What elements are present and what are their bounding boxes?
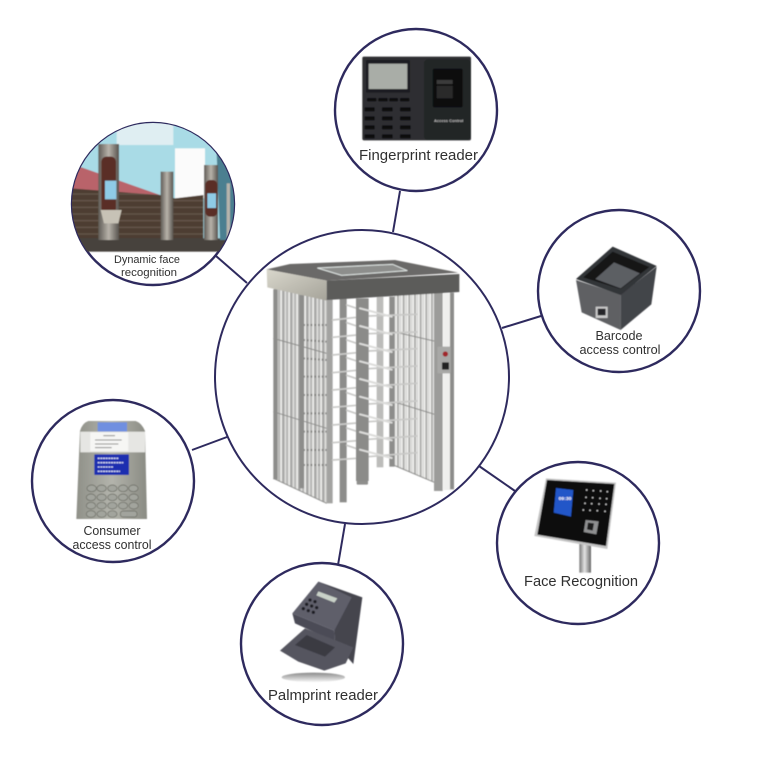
panel: face recognition <box>497 462 659 624</box>
connector: fingerprint reader <box>393 191 400 232</box>
icon: fingerprint terminal: Access Control <box>434 118 463 123</box>
label <box>72 523 152 552</box>
rotor arms <box>333 298 417 481</box>
label: access control <box>72 537 152 552</box>
label: Fingerprint reader <box>359 147 478 164</box>
icon: fingerprint terminal <box>362 57 471 140</box>
panel: central turnstile <box>215 230 509 524</box>
icon: palmprint reader <box>280 582 362 682</box>
label: recognition <box>121 267 177 279</box>
infographic <box>30 28 702 726</box>
label: access control <box>580 342 661 357</box>
icon: face recognition terminal on pole: 09:30 <box>559 496 572 502</box>
connector: barcode access control <box>502 316 541 328</box>
connector: face recognition <box>479 466 515 491</box>
label <box>580 328 661 357</box>
label <box>114 254 180 279</box>
icon: face recognition terminal on pole <box>534 478 616 573</box>
turnstile illustration <box>267 260 459 503</box>
icon: barcode scanner box <box>576 247 657 330</box>
panel: barcode access control <box>538 210 700 372</box>
label: Face Recognition <box>524 573 638 590</box>
turnstile canopy <box>267 260 459 301</box>
icon: consumer terminal <box>76 421 147 519</box>
connector: dynamic face recognition <box>216 256 247 283</box>
panel: consumer access control <box>32 400 194 562</box>
photo: face recognition gates <box>70 120 237 252</box>
panel: dynamic face recognition <box>70 120 237 285</box>
label: Palmprint reader <box>268 687 378 704</box>
connector: consumer access control <box>192 437 227 450</box>
panel: fingerprint reader <box>335 29 497 191</box>
connector: palmprint reader <box>338 524 345 565</box>
label: Dynamic face <box>114 254 180 266</box>
label: Consumer <box>84 523 141 538</box>
reader box on post <box>437 347 451 373</box>
panel: palmprint reader <box>241 563 403 725</box>
label: Barcode <box>596 328 642 343</box>
